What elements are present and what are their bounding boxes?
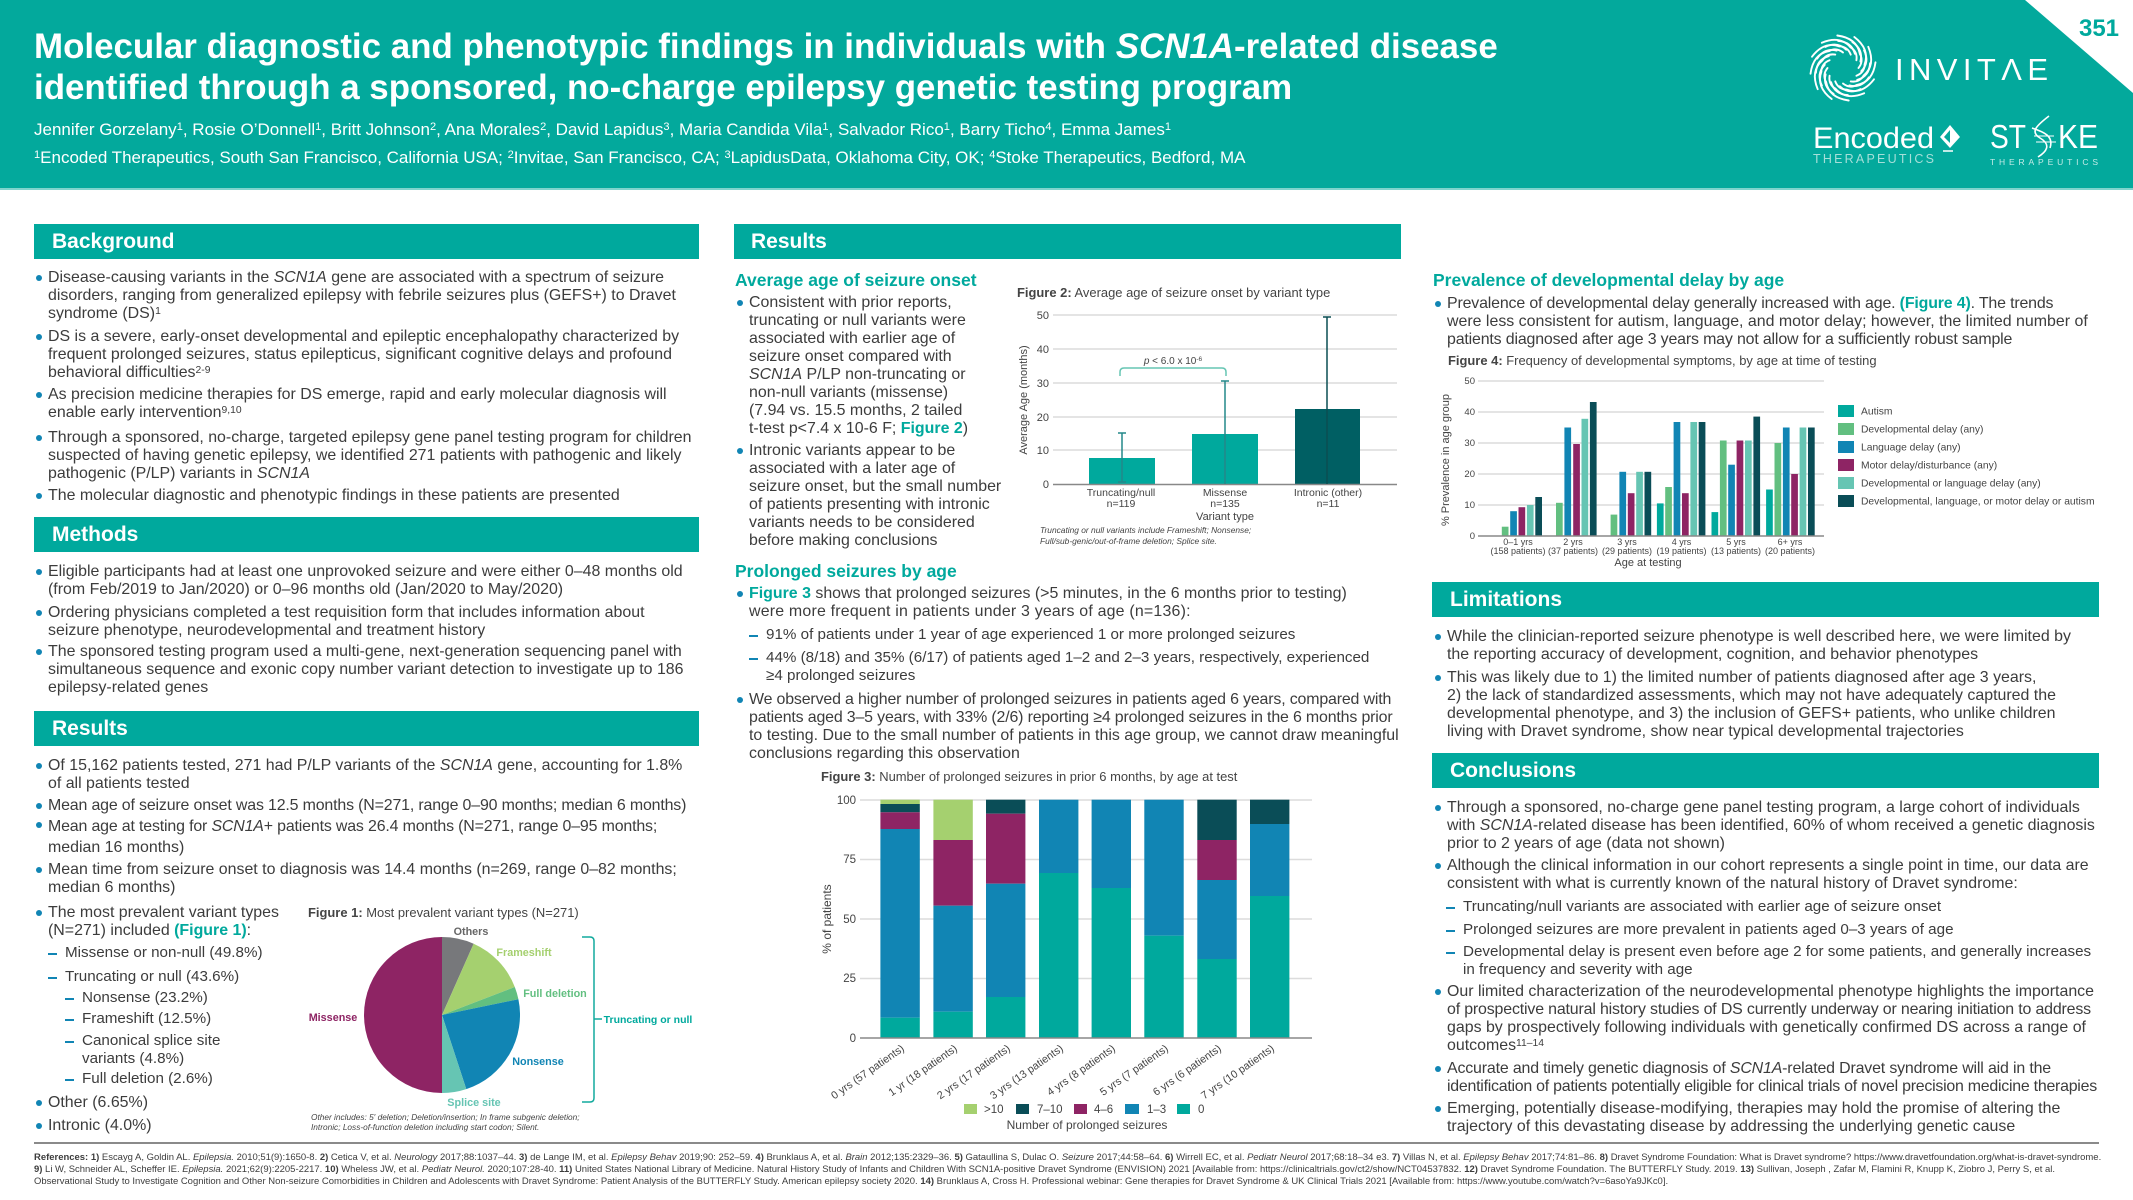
bullet: testing panel: The sponsored testing program used a multi-gene, next-generation sequencing panel with xyxy=(48,643,682,660)
bullet: testing panel: simultaneous sequence and exonic copy number variant detection to investigate up to 186 xyxy=(48,661,684,678)
figure 3: stacked bar chart of prolonged seizures xyxy=(820,769,1312,1132)
corner triangle with poster number: 351 xyxy=(2079,15,2119,42)
figure 3: stacked bar chart of prolonged seizures: Number of prolonged seizures xyxy=(1007,1118,1167,1132)
figure 2: bar chart of onset age: 0 xyxy=(1043,479,1049,491)
bullet: intronic: Intronic (4.0%) xyxy=(48,1117,152,1134)
corner triangle with poster number xyxy=(2025,0,2133,93)
sub-bullet: full deletion: Full deletion (2.6%) xyxy=(82,1070,213,1087)
bullet: timely diagnosis: identification of patients potentially eligible for clinical trials of novel precision medicine therapies xyxy=(1447,1078,2097,1095)
figure 4: grouped bar chart of developmental symptoms: 20 xyxy=(1464,469,1475,480)
sub-bullet: canonical splice: variants (4.8%) xyxy=(82,1050,184,1067)
bullet: testing program: pathogenic (P/LP) variants in SCN1A xyxy=(48,465,310,482)
figure 4: grouped bar chart of developmental symptoms: 4 yrs xyxy=(1672,537,1692,547)
heading: methods xyxy=(34,517,699,552)
bullet: timely diagnosis: Accurate and timely genetic diagnosis of SCN1A-related Dravet syndrome will aid in the xyxy=(1447,1060,2051,1077)
bullet: variant types: The most prevalent variant types xyxy=(48,904,279,921)
sub-bullet: 44 and 35 percent: 44% (8/18) and 35% (6/17) of patients aged 1–2 and 2–3 years, respectively, experienced xyxy=(766,649,1369,666)
figure 4: grouped bar chart of developmental symptoms: 10 xyxy=(1464,500,1475,511)
bullet: figure 3 summary: Figure 3 shows that prolonged seizures (>5 minutes, in the 6 months prior to testing) xyxy=(749,585,1347,602)
bullet: older patients: patients aged 3–5 years, with 33% (2/6) reporting ≥4 prolonged seizures in the 6 months prior xyxy=(749,709,1392,726)
figure 4: grouped bar chart of developmental symptoms: Autism xyxy=(1861,406,1892,418)
figure 4: grouped bar chart of developmental symptoms: (19 patients) xyxy=(1656,546,1707,556)
bullet: truncating earlier onset: non-null variants (missense) xyxy=(749,384,948,401)
sub-bullet: truncating: Truncating or null (43.6%) xyxy=(65,968,239,985)
bullet: DS severity xyxy=(48,328,679,382)
figure 3: stacked bar chart of prolonged seizures: % of patients xyxy=(820,884,834,954)
panel: results middle xyxy=(734,224,1401,1132)
figure 4: grouped bar chart of developmental symptoms: Motor delay/disturbance (any) xyxy=(1861,460,1997,472)
figure 2: bar chart of onset age: Variant type xyxy=(1196,511,1254,523)
bullet: truncating earlier onset: SCN1A P/LP non-truncating or xyxy=(749,366,966,383)
figure 4: grouped bar chart of developmental symptoms: (29 patients) xyxy=(1602,546,1652,556)
bullet: cohort identified: Through a sponsored, no-charge gene panel testing program, a large cohort of individuals xyxy=(1447,799,2080,816)
figure 3: stacked bar chart of prolonged seizures: 50 xyxy=(843,914,856,926)
bullet: testing program xyxy=(48,429,691,483)
sub-bullet: frameshift: Frameshift (12.5%) xyxy=(82,1010,211,1027)
figure 2: bar chart of onset age: 10 xyxy=(1037,445,1049,457)
figure 2: bar chart of onset age: 50 xyxy=(1037,310,1049,322)
bullet: patients tested: of all patients tested xyxy=(48,775,190,792)
heading: methods: Methods xyxy=(52,523,138,546)
bullet: truncating earlier onset: truncating or null variants were xyxy=(749,312,966,329)
title: identified through a sponsored, no-charge epilepsy genetic testing program xyxy=(34,68,1292,107)
bullet: testing program: Through a sponsored, no-charge, targeted epilepsy gene panel testing program for children xyxy=(48,429,691,446)
bullet: truncating earlier onset: (7.94 vs. 15.5 months, 2 tailed xyxy=(749,402,962,419)
figure 4: grouped bar chart of developmental symptoms: 3 yrs xyxy=(1617,537,1637,547)
figure 4: grouped bar chart of developmental symptoms: 0 xyxy=(1470,531,1475,542)
bullet: time to diagnosis: median 6 months) xyxy=(48,879,175,896)
figure 1: pie chart of variant types: Others xyxy=(454,926,488,938)
sub-bullet: 44 and 35 percent: ≥4 prolonged seizures xyxy=(766,667,915,684)
logo: Stoke Therapeutics: THERAPEUTICS xyxy=(1990,157,2098,167)
bullet: testing program: suspected of having genetic epilepsy, we identified 271 patients with pathogenic and likely xyxy=(48,447,681,464)
bullet: precision medicine xyxy=(48,386,667,422)
subheading: prevalence: Prevalence of developmental delay by age xyxy=(1433,270,1784,290)
panel: limitations xyxy=(1432,582,2099,740)
bullet: testing panel xyxy=(48,643,684,697)
figure 1: pie chart of variant types: Figure 1: Most prevalent variant types (N=271) xyxy=(308,905,579,920)
bullet: reporting accuracy: the reporting accuracy of development, cognition, and behavior phenotypes xyxy=(1447,646,1978,663)
heading: results xyxy=(34,711,699,746)
bullet: natural history: consistent with what is currently known of the natural history of Dravet syndrome: xyxy=(1447,875,2018,892)
bullet: older patients: We observed a higher number of prolonged seizures in patients aged 6 years, compared with xyxy=(749,691,1391,708)
figure 4: grouped bar chart of developmental symptoms: 0–1 yrs xyxy=(1503,537,1533,547)
logo: Encoded Therapeutics: THERAPEUTICS xyxy=(1813,152,1934,166)
bullet: intronic later onset: of patients presenting with intronic xyxy=(749,496,990,513)
bullet: characterization: outcomes11–14 xyxy=(1447,1037,1544,1054)
title: Molecular diagnostic and phenotypic findings in individuals with SCN1A-related disease xyxy=(34,27,1498,66)
bullet: intronic later onset: Intronic variants appear to be xyxy=(749,442,955,459)
figure 1: pie chart of variant types: Missense xyxy=(309,1012,357,1024)
figure 2: bar chart of onset age: Figure 2: Average age of seizure onset by variant type xyxy=(1017,285,1330,300)
figure 4: grouped bar chart of developmental symptoms: Age at testing xyxy=(1614,557,1682,569)
bullet: reporting accuracy: While the clinician-reported seizure phenotype is well described here, we were limited by xyxy=(1447,628,2071,645)
figure 3: stacked bar chart of prolonged seizures: Figure 3: Number of prolonged seizures in prior 6 months, by age at test xyxy=(821,769,1238,784)
bullet: truncating earlier onset: Consistent with prior reports, xyxy=(749,294,952,311)
figure 3: stacked bar chart of prolonged seizures: >10 xyxy=(984,1104,1004,1116)
bullet: reasons xyxy=(1447,669,2056,741)
bullet: DS severity: behavioral difficulties2-9 xyxy=(48,364,210,381)
figure 3: stacked bar chart of prolonged seizures: 3 yrs (13 patients) xyxy=(988,1043,1066,1102)
bullet: natural history xyxy=(1447,857,2089,893)
figure 2: bar chart of onset age: Intronic (other) xyxy=(1294,487,1362,499)
references xyxy=(34,1142,2099,1192)
figure 2: bar chart of onset age: n=119 xyxy=(1107,498,1136,510)
bullet: DS severity: frequent prolonged seizures, status epilepticus, significant cognitive delays and profound xyxy=(48,346,672,363)
figure 2: bar chart of onset age: n=11 xyxy=(1317,498,1340,510)
figure 3: stacked bar chart of prolonged seizures: 75 xyxy=(843,854,856,866)
bullet: cohort identified xyxy=(1447,799,2095,853)
panel: results left xyxy=(34,711,699,1134)
logo: Encoded Therapeutics xyxy=(1813,122,1960,166)
bullet: cohort identified: with SCN1A-related disease has been identified, 60% of whom received a genetic diagnosis xyxy=(1447,817,2095,834)
bullet: prevalence summary xyxy=(1447,295,2088,349)
logo: Stoke Therapeutics xyxy=(1990,116,2098,167)
references: Observational Study to Investigate Cognition and Other Non-seizure Comorbidities in Children and Adolescents with Dravet Syndrome: Patient Analysis of the BUTTERFLY Study. American epilepsy society 2020. 14) Brunklaus A, Cross H. Professional webinar: Gene therapies for Dravet Syndrome & UK Clinical Trials 2021 [Available from: https://www.youtube.com/watch?v=6asoYa9JKc0]. xyxy=(34,1176,1668,1187)
affiliations: 1Encoded Therapeutics, South San Francisco, California USA; 2Invitae, San Francisco, CA; 3LapidusData, Oklahoma City, OK; 4Stoke Therapeutics, Bedford, MA xyxy=(34,148,1245,167)
figure 3: stacked bar chart of prolonged seizures: 1 yr (18 patients) xyxy=(886,1043,960,1099)
figure 1: pie chart of variant types xyxy=(308,905,692,1132)
panel: methods xyxy=(34,517,699,696)
figure 3: stacked bar chart of prolonged seizures: 4 yrs (8 patients) xyxy=(1045,1043,1118,1099)
figure 2: bar chart of onset age: p < 6.0 x 10 xyxy=(1144,356,1196,367)
bullet: reasons: 2) the lack of standardized assessments, which may not have adequately captured the xyxy=(1447,687,2056,704)
logo: Stoke Therapeutics: KE xyxy=(2058,118,2098,155)
references: 9) Li W, Schneider AL, Scheffer IE. Epilepsia. 2021;62(9):2205-2217. 10) Wheless JW, et al. Pediatr Neurol. 2020;107:28-40. 11) United States National Library of Medicine. Natural History Study of Infants and Children With SCN1A-positive Dravet Syndrome (ENVISION) 2021 [Available from: https://clinicaltrials.gov/ct2/show/NCT04537832. 12) Dravet Syndrome Foundation. The BUTTERFLY Study. 2019. 13) Sullivan, Joseph , Zafar M, Flamini R, Knupp K, Ziobro J, Perry S, et al. xyxy=(34,1164,2055,1175)
bullet: prevalence summary: patients diagnosed after age 3 years may not allow for a sufficiently robust sample xyxy=(1447,331,2012,348)
figure 3: stacked bar chart of prolonged seizures: 7–10 xyxy=(1037,1104,1063,1116)
heading: limitations: Limitations xyxy=(1450,588,1562,611)
figure 2: bar chart of onset age: Missense xyxy=(1203,487,1247,499)
bullet: characterization: of prospective natural history studies of DS currently underway or nearing initiation to address xyxy=(1447,1001,2091,1018)
bullet: mean testing age xyxy=(48,816,657,858)
figure 2: bar chart of onset age: n=135 xyxy=(1210,498,1240,510)
figure 1: pie chart of variant types: Nonsense xyxy=(512,1056,564,1068)
bullet: characterization xyxy=(1447,983,2094,1055)
figure 3: stacked bar chart of prolonged seizures: 100 xyxy=(837,795,856,807)
figure 2: bar chart of onset age xyxy=(1017,285,1397,546)
bullet: figure 3 summary xyxy=(749,585,1347,621)
figure 4: grouped bar chart of developmental symptoms: 6+ yrs xyxy=(1778,537,1803,547)
heading: results: Results xyxy=(751,230,827,253)
figure 4: grouped bar chart of developmental symptoms: 2 yrs xyxy=(1563,537,1583,547)
figure 3: stacked bar chart of prolonged seizures: 6 yrs (6 patients) xyxy=(1151,1043,1224,1099)
figure 1: pie chart of variant types: Full deletion xyxy=(523,988,587,1000)
bullet: requisition form: Ordering physicians completed a test requisition form that includes information about xyxy=(48,604,644,621)
figure 4: grouped bar chart of developmental symptoms: 5 yrs xyxy=(1726,537,1746,547)
bullet: truncating earlier onset: seizure onset compared with xyxy=(749,348,952,365)
bullet: timely diagnosis xyxy=(1447,1060,2097,1096)
sub-bullet: canonical splice xyxy=(82,1032,220,1068)
panel: prevalence of developmental delay xyxy=(1433,270,2095,569)
figure 3: stacked bar chart of prolonged seizures: 25 xyxy=(843,973,856,985)
heading: conclusions: Conclusions xyxy=(1450,759,1576,782)
sub-bullet: prolonged: Prolonged seizures are more prevalent in patients aged 0–3 years of age xyxy=(1463,921,1954,938)
bullet: characterization: Our limited characterization of the neurodevelopmental phenotype highlights the importance xyxy=(1447,983,2094,1000)
bullet: intronic later onset: seizure onset, but the small number xyxy=(749,478,1001,495)
figure 3: stacked bar chart of prolonged seizures: 4–6 xyxy=(1094,1104,1113,1116)
bullet: patients tested: Of 15,162 patients tested, 271 had P/LP variants of the SCN1A gene, accounting for 1.8% xyxy=(48,757,682,774)
figure 3: stacked bar chart of prolonged seizures: 5 yrs (7 patients) xyxy=(1098,1043,1171,1099)
bullet: time to diagnosis xyxy=(48,861,677,897)
bullet: requisition form: seizure phenotype, neurodevelopmental and treatment history xyxy=(48,622,485,639)
figure 2: bar chart of onset age: -6 xyxy=(1196,356,1203,363)
figure 2: bar chart of onset age: 20 xyxy=(1037,412,1049,424)
figure 3: stacked bar chart of prolonged seizures: 7 yrs (10 patients) xyxy=(1199,1043,1277,1102)
bullet: disease-causing variants: Disease-causing variants in the SCN1A gene are associated with a spectrum of seizure xyxy=(48,269,664,286)
figure 2: bar chart of onset age: Average Age (months) xyxy=(1018,345,1030,455)
heading: results: Results xyxy=(52,717,128,740)
figure 4: grouped bar chart of developmental symptoms: (13 patients) xyxy=(1711,546,1761,556)
logo: Stoke Therapeutics: ST xyxy=(1990,118,2026,155)
bullet: other: Other (6.65%) xyxy=(48,1094,148,1111)
figure 1: pie chart of variant types: Splice site xyxy=(447,1097,501,1109)
bullet: disease-causing variants xyxy=(48,269,676,323)
bullet: emerging therapies: trajectory of this devastating disease by addressing the underlying genetic cause xyxy=(1447,1118,2015,1135)
figure 4: grouped bar chart of developmental symptoms: (20 patients) xyxy=(1765,546,1815,556)
figure 2: bar chart of onset age: Full/sub-genic/out-of-frame deletion; Splice site. xyxy=(1040,536,1217,546)
logo: Invitae: INVITΛE xyxy=(1895,52,2048,87)
bullet: truncating earlier onset: associated with earlier age of xyxy=(749,330,955,347)
sub-bullet: 44 and 35 percent xyxy=(766,649,1369,685)
bullet: intronic later onset: variants needs to be considered xyxy=(749,514,975,531)
bullet: emerging therapies xyxy=(1447,1100,2060,1136)
sub-bullet: developmental delay xyxy=(1463,943,2091,979)
figure 4: grouped bar chart of developmental symptoms: Developmental or language delay (any) xyxy=(1861,478,2041,490)
figure 4: grouped bar chart of developmental symptoms: Developmental, language, or motor delay or autism xyxy=(1861,496,2095,508)
bullet: requisition form xyxy=(48,604,644,640)
figure 3: stacked bar chart of prolonged seizures: 0 yrs (57 patients) xyxy=(829,1043,907,1102)
figure 1: pie chart of variant types: Intronic; Loss-of-function deletion including start codon; Silent. xyxy=(311,1122,539,1132)
figure 3: stacked bar chart of prolonged seizures: 2 yrs (17 patients) xyxy=(935,1043,1013,1102)
figure 3: stacked bar chart of prolonged seizures: 0 xyxy=(850,1033,856,1045)
bullet: testing panel: epilepsy-related genes xyxy=(48,679,208,696)
subheading: average age of seizure onset: Average age of seizure onset xyxy=(735,270,977,290)
bullet: participants: (from Feb/2019 to Jan/2020) or 0–96 months old (Jan/2020 to May/2020) xyxy=(48,581,563,598)
bullet: reporting accuracy xyxy=(1447,628,2071,664)
bullet: findings presented: The molecular diagnostic and phenotypic findings in these patients are presented xyxy=(48,487,620,504)
bullet: intronic later onset: associated with a later age of xyxy=(749,460,955,477)
bullet: truncating earlier onset: t-test p<7.4 x 10-6 F; Figure 2) xyxy=(749,420,968,437)
figure 4: grouped bar chart of developmental symptoms: Figure 4: Frequency of developmental symptoms, by age at time of testing xyxy=(1448,353,1877,368)
heading: limitations xyxy=(1432,582,2099,617)
bullet: intronic later onset: before making conclusions xyxy=(749,532,938,549)
logo: Encoded Therapeutics: Encoded xyxy=(1813,122,1934,155)
bullet: disease-causing variants: syndrome (DS)1 xyxy=(48,305,161,322)
header band xyxy=(0,0,2133,190)
bullet: reasons: living with Dravet syndrome, show near typical developmental trajectories xyxy=(1447,723,1964,740)
sub-bullet: canonical splice: Canonical splice site xyxy=(82,1032,220,1049)
bullet: participants: Eligible participants had at least one unprovoked seizure and were either 0–48 months old xyxy=(48,563,683,580)
figure 4: grouped bar chart of developmental symptoms: Language delay (any) xyxy=(1861,442,1961,454)
figure 2: bar chart of onset age: 30 xyxy=(1037,378,1049,390)
bullet: older patients: to testing. Due to the small number of patients in this age group, we cannot draw meaningful xyxy=(749,727,1399,744)
sub-bullet: nonsense: Nonsense (23.2%) xyxy=(82,989,208,1006)
heading: conclusions xyxy=(1432,753,2099,788)
figure 4: grouped bar chart of developmental symptoms: 50 xyxy=(1464,376,1475,387)
bullet: natural history: Although the clinical information in our cohort represents a single point in time, our data are xyxy=(1447,857,2089,874)
sub-bullet: missense: Missense or non-null (49.8%) xyxy=(65,944,263,961)
sub-bullet: 91 percent: 91% of patients under 1 year of age experienced 1 or more prolonged seizures xyxy=(766,626,1295,643)
sub-bullet: developmental delay: Developmental delay is present even before age 2 for some patients, and generally increases xyxy=(1463,943,2091,960)
authors: Jennifer Gorzelany1, Rosie O’Donnell1, Britt Johnson2, Ana Morales2, David Lapidus3, Maria Candida Vila1, Salvador Rico1, Barry Ticho4, Emma James1 xyxy=(34,120,1171,139)
figure 4: grouped bar chart of developmental symptoms: (158 patients) xyxy=(1490,546,1546,556)
figure 2: bar chart of onset age: Truncating/null xyxy=(1087,487,1155,499)
panel: background xyxy=(34,224,699,504)
figure 3: stacked bar chart of prolonged seizures: 0 xyxy=(1198,1104,1204,1116)
heading: background xyxy=(34,224,699,259)
figure 2: bar chart of onset age: 40 xyxy=(1037,344,1049,356)
subheading: prolonged seizures by age: Prolonged seizures by age xyxy=(735,561,957,581)
bullet: mean testing age: Mean age at testing for SCN1A+ patients was 26.4 months (N=271, range 0–95 months; xyxy=(48,818,657,835)
sub-bullet: developmental delay: in frequency and severity with age xyxy=(1463,961,1693,978)
figure 4: grouped bar chart of developmental symptoms: 40 xyxy=(1464,407,1475,418)
figure 1: pie chart of variant types: Frameshift xyxy=(496,947,552,959)
bullet: disease-causing variants: disorders, ranging from generalized epilepsy with febrile seizures plus (GEFS+) to Dravet xyxy=(48,287,676,304)
bullet: precision medicine: enable early intervention9,10 xyxy=(48,404,242,421)
sub-bullet: truncating: Truncating/null variants are associated with earlier age of seizure onset xyxy=(1463,898,1941,915)
figure 4: grouped bar chart of developmental symptoms: (37 patients) xyxy=(1548,546,1598,556)
figure 4: grouped bar chart of developmental symptoms: 30 xyxy=(1464,438,1475,449)
bullet: reasons: developmental phenotype, and 3) the inclusion of GEFS+ patients, who unlike children xyxy=(1447,705,2056,722)
bullet: emerging therapies: Emerging, potentially disease-modifying, therapies may hold the promise of altering the xyxy=(1447,1100,2060,1117)
bullet: participants xyxy=(48,563,683,599)
bullet: characterization: gaps by prospectively following individuals with genetically confirmed DS across a range of xyxy=(1447,1019,2086,1036)
bullet: mean onset: Mean age of seizure onset was 12.5 months (N=271, range 0–90 months; median 6 months) xyxy=(48,797,686,814)
bullet: prevalence summary: Prevalence of developmental delay generally increased with age. (Figure 4). The trends xyxy=(1447,295,2053,312)
figure 1: pie chart of variant types: Other includes: 5′ deletion; Deletion/insertion; In frame subgenic deletion; xyxy=(311,1112,580,1122)
bullet: patients tested xyxy=(48,757,682,793)
bullet: mean testing age: median 16 months) xyxy=(48,839,184,856)
figure 1: pie chart of variant types: Truncating or null xyxy=(604,1014,692,1026)
title xyxy=(34,27,1498,107)
figure 2: bar chart of onset age: Truncating or null variants include Frameshift; Nonsense; xyxy=(1040,525,1252,535)
figure 3: stacked bar chart of prolonged seizures: 1–3 xyxy=(1147,1104,1166,1116)
figure 4: grouped bar chart of developmental symptoms: % Prevalence in age group xyxy=(1440,394,1452,526)
heading: background: Background xyxy=(52,230,175,253)
bullet: older patients: conclusions regarding this observation xyxy=(749,745,1020,762)
bullet: precision medicine: As precision medicine therapies for DS emerge, rapid and early molecular diagnosis will xyxy=(48,386,667,403)
bullet: prevalence summary: were less consistent for autism, language, and motor delay; however, the limited number of xyxy=(1447,313,2088,330)
figure 4: grouped bar chart of developmental symptoms xyxy=(1440,353,2095,569)
bullet: truncating earlier onset xyxy=(749,294,968,438)
bullet: variant types xyxy=(48,904,279,940)
bullet: intronic later onset xyxy=(749,442,1001,550)
bullet: figure 3 summary: were more frequent in patients under 3 years of age (n=136): xyxy=(749,603,1191,620)
heading: results xyxy=(734,224,1401,259)
figure 4: grouped bar chart of developmental symptoms: Developmental delay (any) xyxy=(1861,424,1983,436)
bullet: cohort identified: prior to 2 years of age (data not shown) xyxy=(1447,835,1725,852)
bullet: variant types: (N=271) included (Figure 1): xyxy=(48,922,251,939)
bullet: time to diagnosis: Mean time from seizure onset to diagnosis was 14.4 months (n=269, range 0–82 months; xyxy=(48,861,677,878)
panel: conclusions xyxy=(1432,753,2099,1135)
bullet: older patients xyxy=(749,691,1399,763)
bullet: DS severity: DS is a severe, early-onset developmental and epileptic encephalopathy characterized by xyxy=(48,328,679,345)
logo: Invitae xyxy=(1810,34,2048,102)
references: References: 1) Escayg A, Goldin AL. Epilepsia. 2010;51(9):1650-8. 2) Cetica V, et al. Neurology 2017;88:1037–44. 3) de Lange IM, et al. Epilepsy Behav 2019;90: 252–59. 4) Brunklaus A, et al. Brain 2012;135:2329–36. 5) Gataullina S, Dulac O. Seizure 2017;44:58–64. 6) Wirrell EC, et al. Pediatr Neurol 2017;68:18–34 e3. 7) Villas N, et al. Epilepsy Behav 2017;74:81–86. 8) Dravet Syndrome Foundation: What is Dravet syndrome? https://www.dravetfoundation.org/what-is-dravet-syndrome. xyxy=(34,1152,2101,1163)
bullet: reasons: This was likely due to 1) the limited number of patients diagnosed after age 3 years, xyxy=(1447,669,2036,686)
